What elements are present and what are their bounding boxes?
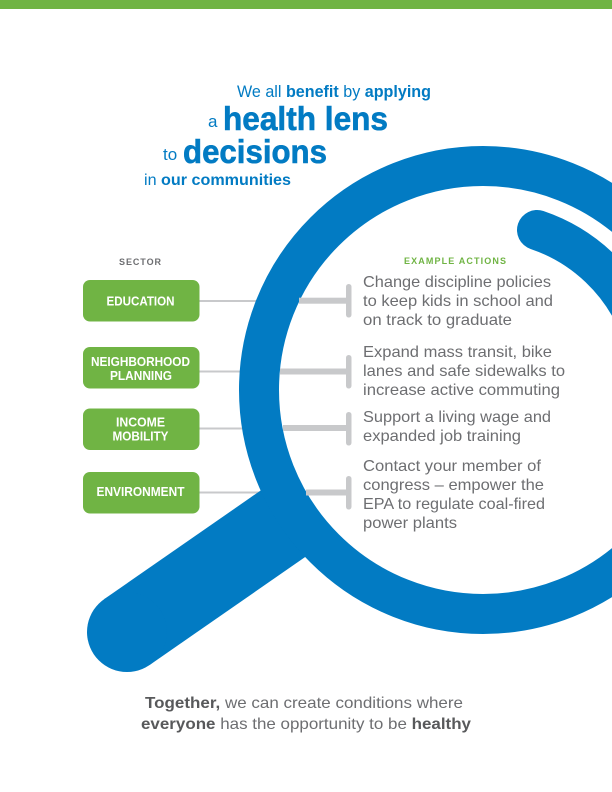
title: We all benefit by applying <box>237 82 431 101</box>
example actions heading: EXAMPLE ACTIONS <box>404 256 506 266</box>
closing statement <box>141 695 471 733</box>
action: environment: EPA to regulate coal-fired <box>363 496 545 513</box>
title: decisions <box>183 133 327 170</box>
title: in our communities <box>144 172 291 189</box>
title: health lens <box>223 100 388 137</box>
icon: lens ring <box>259 166 612 614</box>
action: environment: congress – empower the <box>363 477 544 494</box>
action: education: to keep kids in school and <box>363 293 553 310</box>
action: income mobility <box>363 409 551 445</box>
magnifying glass <box>87 166 612 672</box>
action: education: Change discipline policies <box>363 274 551 291</box>
sector: education <box>83 280 200 322</box>
top green band <box>0 0 612 9</box>
sector: income mobility <box>83 408 200 450</box>
thick connector lines with end bars <box>280 284 352 510</box>
sector: environment <box>83 472 200 514</box>
sector: income mobility: MOBILITY <box>112 429 169 444</box>
sector heading: SECTOR <box>119 257 162 267</box>
sector: education: EDUCATION <box>106 294 174 309</box>
thin connector lines <box>199 300 269 494</box>
action: environment: Contact your member of <box>363 458 542 475</box>
sector: neighborhood planning: NEIGHBORHOOD <box>91 354 190 369</box>
action: environment <box>363 458 545 532</box>
action: education: on track to graduate <box>363 312 512 329</box>
action: income mobility: Support a living wage and <box>363 409 551 426</box>
action: neighborhood planning: increase active commuting <box>363 382 560 399</box>
action: education <box>363 274 553 329</box>
title: a <box>208 112 218 131</box>
title: to <box>163 145 177 164</box>
sector: neighborhood planning: PLANNING <box>110 368 172 383</box>
sector: neighborhood planning <box>83 347 200 388</box>
action: income mobility: expanded job training <box>363 428 521 445</box>
closing statement: everyone has the opportunity to be healthy <box>141 716 471 733</box>
action: neighborhood planning: lanes and safe sidewalks to <box>363 363 565 380</box>
icon: handle <box>127 498 320 632</box>
action: neighborhood planning: Expand mass transit, bike <box>363 344 552 361</box>
action: neighborhood planning <box>363 344 565 399</box>
sector: environment: ENVIRONMENT <box>96 484 185 499</box>
icon: lens glare <box>537 230 612 328</box>
closing statement: Together, we can create conditions where <box>145 695 463 712</box>
action: environment: power plants <box>363 515 457 532</box>
sector: income mobility: INCOME <box>116 415 165 430</box>
title <box>144 82 431 189</box>
icon: handle round end <box>87 592 167 672</box>
